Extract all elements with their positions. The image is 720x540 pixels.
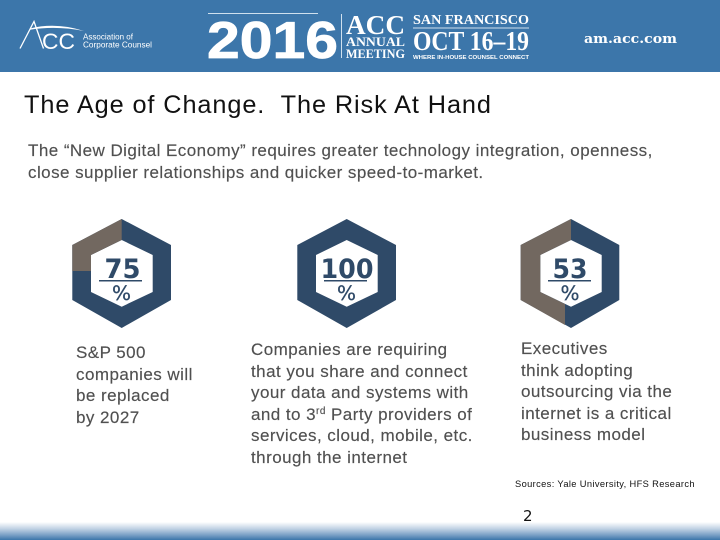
header banner [0, 0, 720, 72]
caption: 75 percent: companies will [76, 365, 193, 384]
logo: Association of Corporate Counsel: Association of [83, 32, 134, 42]
caption: 75 percent [76, 343, 193, 427]
caption: 100 percent [251, 340, 473, 467]
caption: 53 percent: business model [521, 425, 645, 444]
sources: Sources: Yale University, HFS Research [515, 479, 695, 489]
logo rule above 2016 [208, 13, 318, 14]
hexagon stat: 75 percent [72, 219, 171, 328]
caption: 100 percent: Companies are requiring [251, 340, 448, 359]
caption: 100 percent: through the internet [251, 448, 407, 467]
event place and date: OCT 16–19 [413, 26, 529, 56]
event place and date: WHERE IN-HOUSE COUNSEL CONNECT [413, 55, 530, 61]
event place and date: SAN FRANCISCO [413, 13, 529, 28]
hexagon stat: 75 percent: 75 [104, 254, 140, 285]
title: The Age of Change. The Risk At Hand [24, 91, 492, 119]
hexagon stat: 53 percent [520, 219, 620, 328]
event place and date [413, 13, 530, 61]
event name: ANNUAL [346, 35, 405, 49]
caption: 100 percent: services, cloud, mobile, etc. [251, 426, 473, 445]
page number: 2 [523, 507, 533, 525]
intro text: The “New Digital Economy” requires greater technology integration, openness, [28, 141, 653, 160]
hexagon stat: 53 percent: 53 [552, 254, 588, 285]
caption: 53 percent: think adopting [521, 361, 633, 380]
caption: 75 percent: be replaced [76, 386, 170, 405]
hexagon stat: 53 percent: % [560, 282, 580, 305]
caption: 75 percent: by 2027 [76, 408, 140, 427]
caption: 100 percent: that you share and connect [251, 362, 468, 381]
hexagon stat: 100 percent: % [337, 282, 356, 305]
website: am.acc.com [584, 32, 677, 47]
event name [346, 10, 405, 61]
caption: 53 percent: outsourcing via the [521, 382, 672, 401]
footer gradient band [0, 522, 720, 540]
caption: 53 percent [521, 339, 672, 444]
caption: 53 percent: internet is a critical [521, 404, 672, 423]
caption: 100 percent: and to 3rd Party providers of [251, 405, 472, 424]
caption: 53 percent: Executives [521, 339, 608, 358]
caption: 75 percent: S&P 500 [76, 343, 146, 362]
hexagon stat: 75 percent: % [112, 282, 131, 305]
hexagon stat: 100 percent: 100 [320, 254, 374, 285]
logo: Association of Corporate Counsel: CC [42, 29, 75, 54]
logo: Association of Corporate Counsel [20, 22, 152, 54]
hexagon stat: 100 percent [297, 219, 396, 328]
event name: ACC [346, 10, 405, 40]
event year 2016: 2016 [207, 12, 338, 70]
intro text [28, 141, 653, 182]
divider [341, 14, 342, 58]
event name: MEETING [346, 47, 405, 61]
caption: 100 percent: your data and systems with [251, 383, 469, 402]
intro text: close supplier relationships and quicker speed-to-market. [28, 163, 484, 182]
logo: Association of Corporate Counsel: Corporate Counsel [83, 40, 152, 50]
